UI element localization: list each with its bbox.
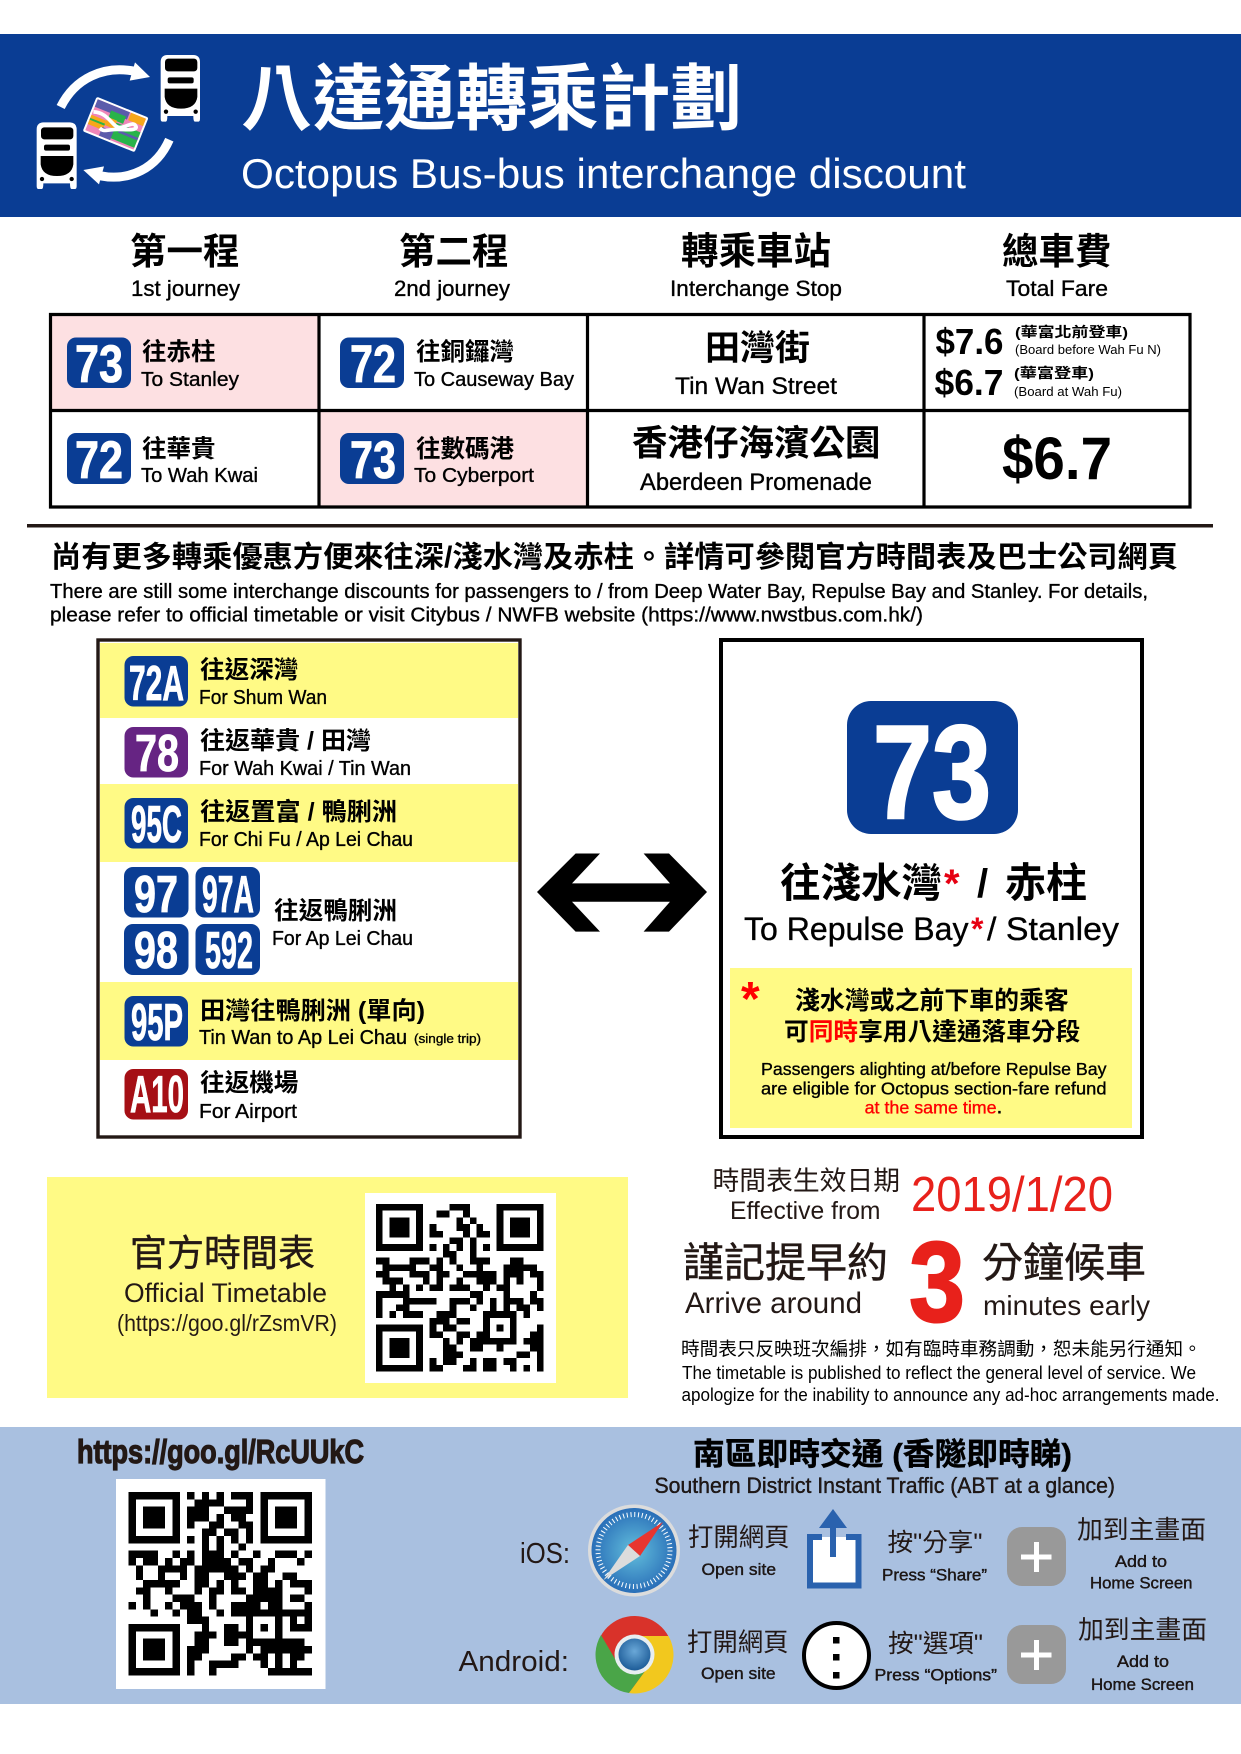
information paragraph: 尚有更多轉乘優惠方便來往深/淺水灣及赤柱。詳情可參閱官方時間表及巴士公司網頁 <box>51 541 1178 574</box>
table column headings: 第一程 <box>130 231 240 272</box>
route 95C: 95C <box>131 796 182 854</box>
table column headings: Total Fare <box>1006 276 1108 301</box>
route 95P <box>124 994 481 1052</box>
step: press share: 按"分享" <box>888 1529 982 1557</box>
step: add to home screen (Android): Home Screen <box>1091 1675 1194 1694</box>
information paragraph: There are still some interchange discounts for passengers to / from Deep Water Bay, Repulse Bay and Stanley. For details, <box>50 581 1148 603</box>
row 1 journey 2: route 72 to Causeway Bay: To Causeway Bay <box>414 369 574 391</box>
step: add to home screen (iOS): 加到主畫面 <box>1077 1516 1206 1544</box>
callout: section-fare note: * <box>741 973 760 1026</box>
row 2 interchange stop: 香港仔海濱公園 <box>632 423 881 463</box>
row 2 journey 1: route 72 to Wah Kwai: 72 <box>75 431 123 490</box>
row 1 journey 1: route 73 to Stanley: To Stanley <box>141 369 239 391</box>
row 1 interchange stop: Tin Wan Street <box>675 373 837 400</box>
row 1 total fare: (Board at Wah Fu) <box>1014 385 1122 399</box>
timetable text: Official Timetable <box>124 1278 327 1308</box>
arrive early notice <box>683 1219 1150 1346</box>
route A10: A10 <box>130 1066 184 1124</box>
route 72A <box>124 656 327 711</box>
step: press share: Press “Share” <box>882 1566 987 1584</box>
timetable text: 官方時間表 <box>130 1233 315 1274</box>
callout: section-fare note: 淺水灣或之前下車的乘客 <box>795 986 1069 1015</box>
destination heading: * <box>944 862 960 906</box>
step: open site (iOS) <box>688 1524 790 1579</box>
link: https://goo.gl/RcUUkC <box>77 1433 364 1470</box>
row 2 journey 2: route 73 to Cyberport <box>340 431 534 490</box>
step: press options <box>874 1630 997 1684</box>
row 2 interchange stop: Aberdeen Promenade <box>640 469 872 496</box>
table column headings: 第二程 <box>399 231 508 272</box>
timetable disclaimer: The timetable is published to reflect the general level of service. We <box>682 1362 1196 1383</box>
route 95P: 田灣往鴨脷洲 (單向) <box>200 997 425 1025</box>
timetable text: (https://goo.gl/rZsmVR) <box>117 1310 337 1336</box>
routes 97 97A 98 592: 97A <box>202 866 254 924</box>
icon: Chrome <box>596 1616 673 1693</box>
table column headings <box>130 230 1112 301</box>
route 95C: For Chi Fu / Ap Lei Chau <box>199 829 413 851</box>
arrive early notice: 謹記提早約 <box>683 1240 888 1286</box>
routes 97 97A 98 592 <box>124 866 413 980</box>
callout: section-fare note: . <box>997 1098 1002 1118</box>
row 2 journey 2: route 73 to Cyberport: To Cyberport <box>414 465 534 487</box>
step: add to home screen (iOS) <box>1077 1516 1206 1592</box>
route 95C: 往返置富 / 鴨脷洲 <box>200 797 397 826</box>
step: add to home screen (iOS): Add to <box>1115 1552 1167 1571</box>
row 2 interchange stop <box>632 423 881 496</box>
panel: Southern District Instant Traffic <box>0 1427 1241 1704</box>
row 1 journey 2: route 72 to Causeway Bay: 72 <box>350 335 396 394</box>
effective date: 2019/1/20 <box>911 1168 1113 1222</box>
panel: official timetable <box>47 1177 628 1398</box>
panel: route 73 <box>721 640 1142 1137</box>
arrive early notice: Arrive around <box>685 1287 862 1320</box>
icon: add (Android) <box>1007 1625 1066 1684</box>
route 72A: 往返深灣 <box>200 656 298 684</box>
row 1 total fare: (華富北前登車) <box>1015 324 1128 340</box>
step: press share <box>882 1529 987 1584</box>
icon: buses interchanging around Octopus card <box>36 55 200 189</box>
callout: section-fare note <box>730 968 1132 1128</box>
panel: other interchange routes <box>98 640 520 1137</box>
row 2 journey 1: route 72 to Wah Kwai: To Wah Kwai <box>141 465 258 487</box>
icon: add (iOS) <box>1007 1527 1066 1586</box>
arrive early notice: 分鐘候車 <box>982 1240 1146 1286</box>
row 2 journey 1: route 72 to Wah Kwai <box>67 431 258 490</box>
routes 97 97A 98 592: 97 <box>134 866 178 924</box>
row 1 total fare: $6.7 <box>934 362 1004 403</box>
information paragraph: please refer to official timetable or visit Citybus / NWFB website (https://www.nwstbus.com.hk/) <box>50 604 923 626</box>
row 1 total fare: (華富登車) <box>1014 365 1094 381</box>
timetable disclaimer: 時間表只反映班次編排，如有臨時車務調動，恕未能另行通知。 <box>681 1338 1202 1360</box>
route 78 <box>124 725 411 783</box>
routes 97 97A 98 592: 往返鴨脷洲 <box>274 897 397 925</box>
step: press options: 按"選項" <box>888 1630 983 1658</box>
routes 97 97A 98 592: 592 <box>205 922 253 980</box>
route 95C <box>124 796 413 854</box>
step: add to home screen (Android) <box>1078 1616 1207 1694</box>
row 1 journey 1: route 73 to Stanley: 往赤柱 <box>142 338 216 366</box>
heading: Southern District: Southern District Instant Traffic (ABT at a glance) <box>654 1473 1115 1498</box>
route 73 badge: 73 <box>873 699 991 847</box>
row 2 journey 1: route 72 to Wah Kwai: 往華貴 <box>142 435 216 463</box>
step: add to home screen (Android): Add to <box>1117 1652 1169 1671</box>
row 1 journey 1: route 73 to Stanley <box>67 335 239 394</box>
effective date <box>712 1166 1113 1225</box>
routes 97 97A 98 592: For Ap Lei Chau <box>272 928 413 950</box>
route 95P: Tin Wan to Ap Lei Chau <box>199 1027 407 1049</box>
route 72A: For Shum Wan <box>199 687 327 709</box>
step: open site (iOS): 打開網頁 <box>688 1524 790 1552</box>
arrive early notice: minutes early <box>983 1290 1150 1321</box>
timetable disclaimer <box>681 1338 1220 1405</box>
row 1 total fare: (Board before Wah Fu N) <box>1015 343 1161 357</box>
destination heading <box>744 860 1119 947</box>
information paragraph <box>50 541 1178 626</box>
step: press options: Press “Options” <box>874 1666 997 1684</box>
route A10 <box>124 1066 298 1124</box>
route 72A: 72A <box>129 657 184 711</box>
icon: options menu <box>804 1623 869 1688</box>
effective date: Effective from <box>730 1197 880 1225</box>
table column headings: 2nd journey <box>394 276 510 301</box>
callout: section-fare note: Passengers alighting at/before Repulse Bay <box>761 1059 1107 1079</box>
icon: Safari <box>588 1504 680 1596</box>
arrive early notice: 3 <box>909 1219 965 1346</box>
heading: Southern District: 南區即時交通 (香隧即時睇) <box>693 1437 1072 1472</box>
arrow: two-way <box>537 854 707 932</box>
row 1 journey 2: route 72 to Causeway Bay: 往銅鑼灣 <box>416 338 514 366</box>
fare table <box>50 314 1190 507</box>
row 1 journey 1: route 73 to Stanley: 73 <box>75 335 123 394</box>
table column headings: 總車費 <box>1002 231 1112 272</box>
header banner <box>0 34 1241 217</box>
step: open site (Android): 打開網頁 <box>687 1629 789 1657</box>
title: Chinese: 八達通轉乘計劃 <box>241 60 742 140</box>
row 1 total fare: $7.6 <box>936 321 1004 362</box>
route 78: 78 <box>135 725 179 783</box>
QR code: timetable <box>376 1207 544 1368</box>
row 2 total fare: $6.7 <box>1002 425 1112 492</box>
route 78: For Wah Kwai / Tin Wan <box>199 758 411 780</box>
effective date: 時間表生效日期 <box>712 1166 900 1196</box>
Android label: Android: <box>458 1646 569 1678</box>
table column headings: 轉乘車站 <box>681 230 831 272</box>
iOS label: iOS: <box>520 1538 570 1570</box>
heading: Southern District <box>654 1437 1115 1498</box>
table column headings: 1st journey <box>131 276 240 301</box>
callout: section-fare note: 可同時享用八達通落車分段 <box>784 1017 1081 1046</box>
step: open site (Android) <box>687 1629 789 1683</box>
timetable text <box>117 1233 337 1336</box>
step: open site (iOS): Open site <box>702 1560 776 1579</box>
destination heading: / <box>977 862 988 906</box>
callout: section-fare note: are eligible for Octopus section-fare refund <box>761 1078 1106 1098</box>
title: English: Octopus Bus-bus interchange discount <box>241 150 966 197</box>
step: add to home screen (Android): 加到主畫面 <box>1078 1616 1207 1644</box>
step: open site (Android): Open site <box>701 1664 776 1683</box>
route 78: 往返華貴 / 田灣 <box>200 727 371 755</box>
callout: section-fare note: at the same time <box>865 1098 997 1118</box>
route 95P: 95P <box>131 994 183 1052</box>
route 95P: (single trip) <box>414 1031 481 1046</box>
destination heading: * <box>971 911 984 947</box>
destination heading: To Repulse Bay <box>744 911 968 947</box>
icon: share <box>810 1509 858 1586</box>
row 1 journey 2: route 72 to Causeway Bay <box>340 335 574 394</box>
destination heading: 赤柱 <box>1005 860 1087 906</box>
row 1 total fare <box>934 321 1161 403</box>
route A10: For Airport <box>199 1101 297 1123</box>
route A10: 往返機場 <box>200 1069 298 1097</box>
step: add to home screen (iOS): Home Screen <box>1090 1574 1192 1592</box>
row 1 interchange stop: 田灣街 <box>705 329 810 368</box>
routes 97 97A 98 592: 98 <box>134 922 178 980</box>
destination heading: / Stanley <box>987 911 1119 947</box>
row 2 journey 2: route 73 to Cyberport: 73 <box>350 431 396 490</box>
destination heading: 往淺水灣 <box>780 860 942 906</box>
row 2 journey 2: route 73 to Cyberport: 往數碼港 <box>416 435 514 463</box>
row 1 interchange stop <box>675 329 837 400</box>
QR code: traffic site <box>128 1496 312 1672</box>
table column headings: Interchange Stop <box>670 276 842 301</box>
